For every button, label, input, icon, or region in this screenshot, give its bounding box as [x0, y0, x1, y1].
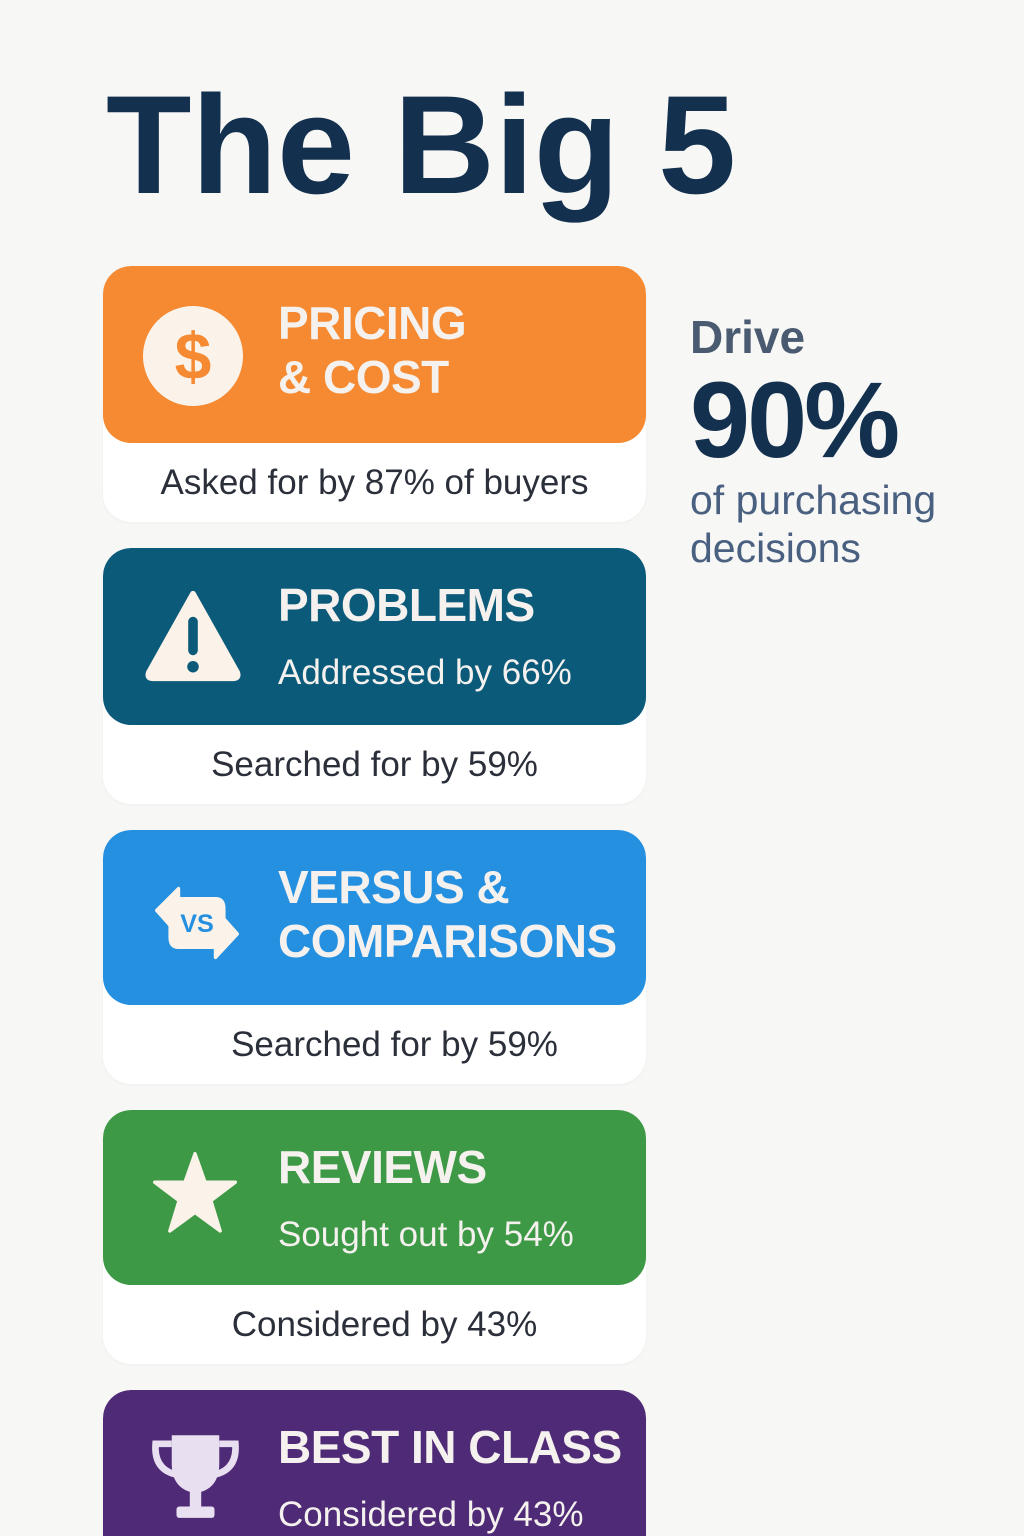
- heading: BEST IN CLASS: [278, 1421, 622, 1473]
- panel: problems: [103, 548, 646, 804]
- panel: versus: [103, 830, 646, 1084]
- heading: PROBLEMS: [278, 579, 535, 631]
- icon: vs arrows: VS: [180, 910, 214, 938]
- icon: dollar: [143, 306, 243, 406]
- callout: drive 90%: [690, 311, 936, 571]
- icon: warning: [146, 590, 240, 682]
- heading: REVIEWS: [278, 1141, 487, 1193]
- panel: reviews: Sought out by 54%: [278, 1215, 574, 1254]
- title: The Big 5: [106, 66, 736, 223]
- callout: drive 90%: Drive: [690, 311, 805, 363]
- heading: [278, 297, 466, 403]
- panel: reviews: [103, 1110, 646, 1364]
- callout: drive 90%: of purchasing decisions: [690, 477, 936, 571]
- callout: drive 90%: 90%: [690, 359, 897, 480]
- icon: trophy: [152, 1435, 239, 1518]
- heading: COMPARISONS: [278, 915, 617, 967]
- panel: best in class: Considered by 43%: [278, 1495, 583, 1534]
- text: Searched for by 59%: [231, 1025, 558, 1064]
- panel: pricing: [103, 266, 646, 522]
- panel: problems: Addressed by 66%: [278, 653, 572, 692]
- text: Searched for by 59%: [211, 745, 538, 784]
- heading: & COST: [278, 351, 449, 403]
- text: Considered by 43%: [232, 1305, 537, 1344]
- icon: vs arrows: [155, 886, 239, 960]
- panel: best in class: [103, 1390, 646, 1536]
- heading: VERSUS &: [278, 861, 509, 913]
- heading: [278, 861, 617, 967]
- icon: dollar: $: [175, 319, 211, 393]
- text: Asked for by 87% of buyers: [160, 463, 588, 502]
- heading: PRICING: [278, 297, 466, 349]
- icon: star: [152, 1152, 237, 1233]
